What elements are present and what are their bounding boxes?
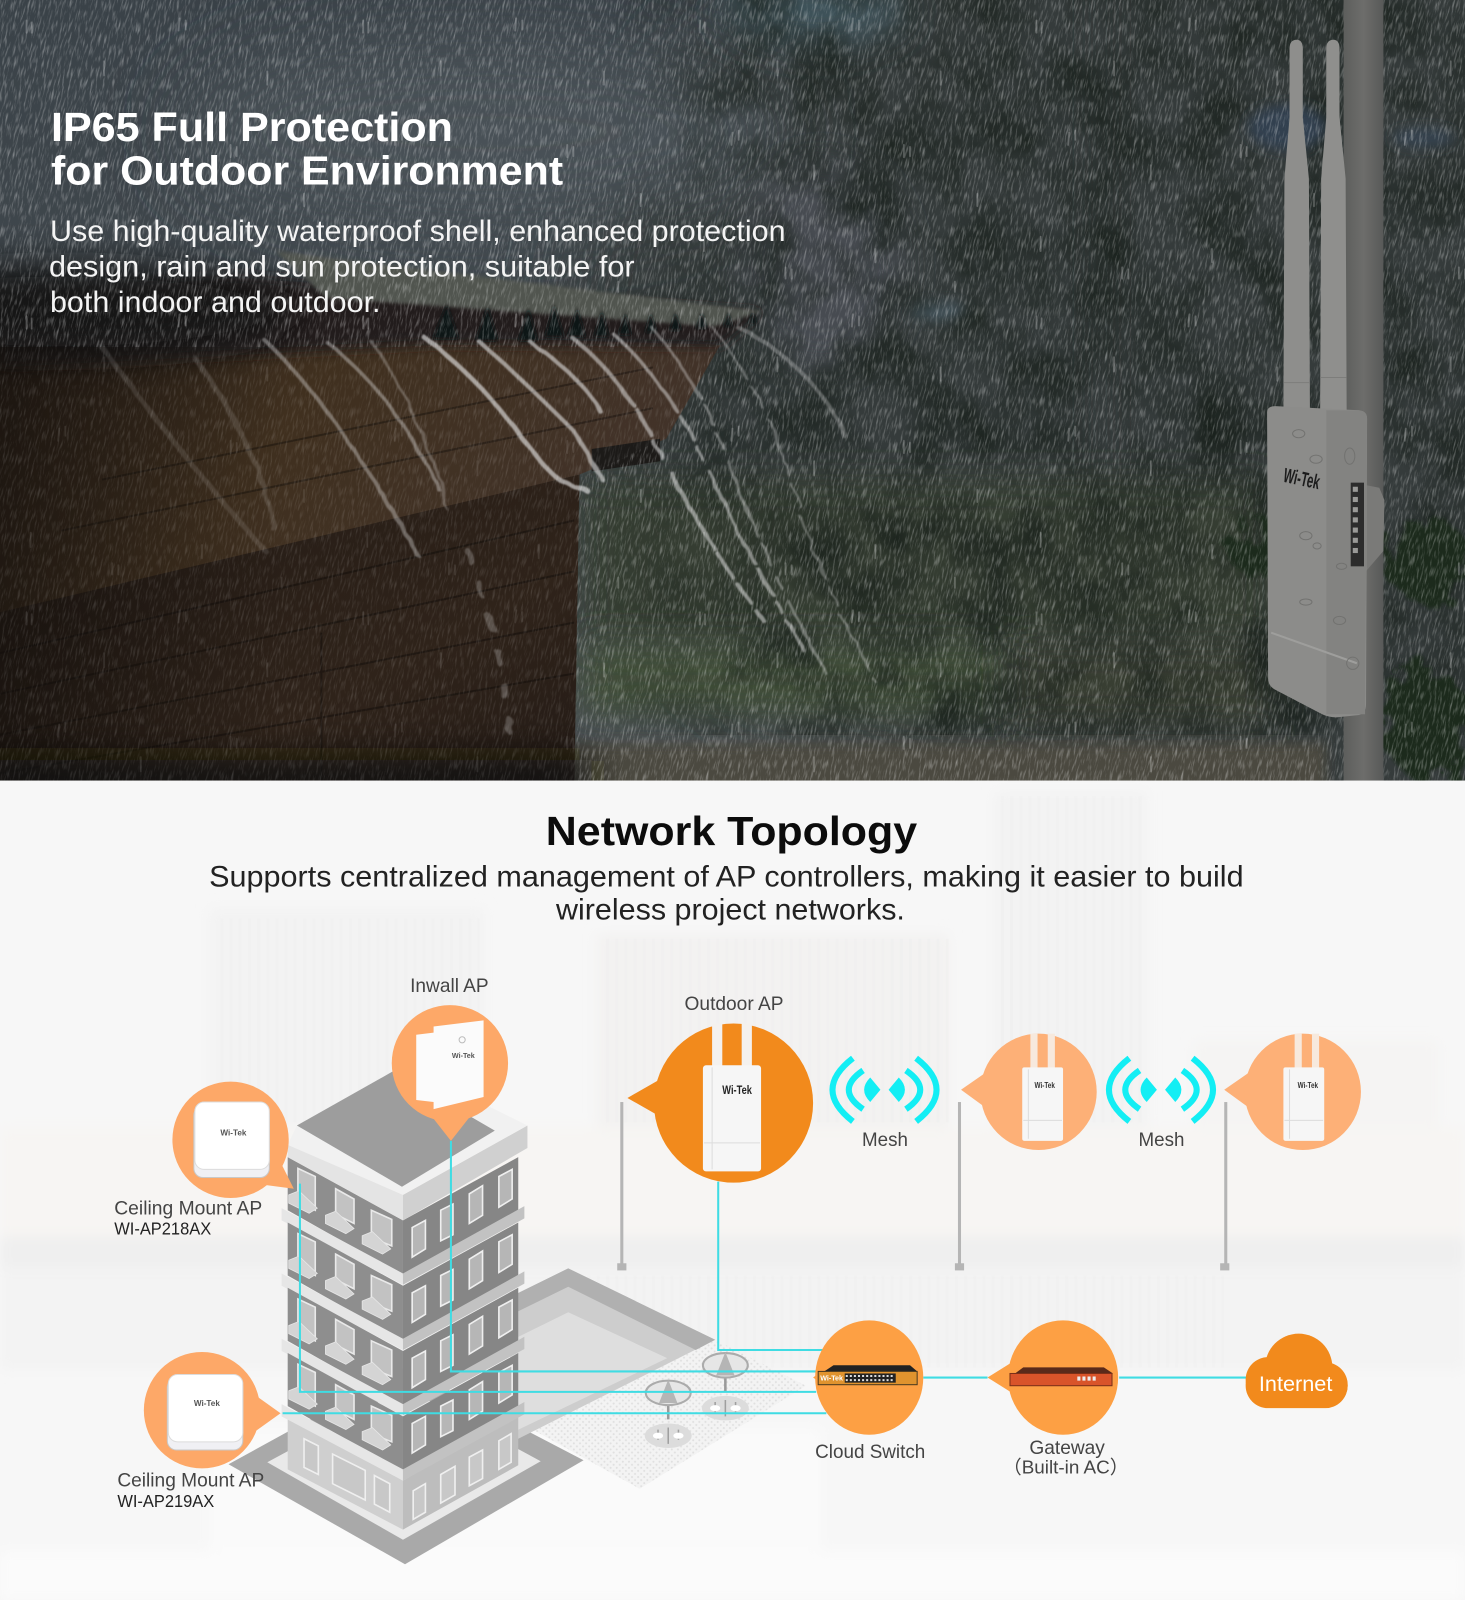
icon: mesh signal 2 [1109, 1058, 1213, 1121]
bubble: outdoor AP 3: Wi-Tek [1298, 1081, 1318, 1090]
label: gateway: （Built-in AC） [1003, 1456, 1129, 1477]
hero title [52, 112, 563, 185]
poles [617, 1102, 1229, 1270]
subheading [209, 861, 1244, 926]
icon: mesh signal 1 [832, 1058, 937, 1121]
pole [1344, 0, 1383, 781]
label: ceiling mount AP 219: WI-AP219AX [117, 1491, 215, 1511]
label: outdoor AP: Outdoor AP [685, 993, 784, 1015]
bubble: cloud switch: Wi-Tek [820, 1375, 843, 1383]
bubble: inwall AP [392, 1005, 508, 1141]
roof and wooden building [0, 251, 763, 801]
heading: Network Topology [546, 808, 917, 854]
bubble: ceiling AP 219: Wi-Tek [194, 1399, 220, 1408]
label: cloud switch: Cloud Switch [815, 1441, 925, 1463]
bubble: outdoor AP 2: Wi-Tek [1034, 1081, 1055, 1090]
roof [288, 1071, 527, 1220]
icon: internet cloud: Internet [1259, 1372, 1332, 1396]
hero title: IP65 Full Protection [51, 104, 453, 150]
water streams from roof [102, 324, 877, 735]
bubble: outdoor AP 3 [1224, 1034, 1361, 1150]
label: mesh 2: Mesh [1139, 1129, 1184, 1151]
panel: network topology [0, 781, 1465, 1600]
bubble: cloud switch [813, 1320, 923, 1435]
bubble: ceiling AP 218: Wi-Tek [220, 1129, 247, 1138]
bubble: main outdoor AP [627, 1023, 813, 1183]
label: ceiling mount AP 219: Ceiling Mount AP [117, 1470, 264, 1492]
umbrellas [702, 1352, 749, 1420]
umbrella 2 [645, 1380, 692, 1448]
icon: internet cloud [1246, 1334, 1348, 1408]
logo on outdoor AP: Wi-Tek [1281, 465, 1322, 494]
courtyard and plaza [229, 1268, 806, 1564]
hero description [50, 220, 784, 312]
bubble: inwall AP: Wi-Tek [452, 1052, 475, 1060]
rain overlay [0, 0, 1465, 781]
hero title: for Outdoor Environment [51, 148, 564, 194]
hero description: design, rain and sun protection, suitable for [49, 251, 635, 284]
label: inwall AP: Inwall AP [410, 975, 489, 997]
bubble: outdoor AP 2 [961, 1034, 1097, 1150]
hero description: Use high-quality waterproof shell, enhanced protection [50, 215, 786, 248]
label: ceiling mount AP 219 [117, 1470, 264, 1511]
label: mesh 1: Mesh [862, 1129, 908, 1151]
cables [283, 1141, 1247, 1413]
faint city background [0, 791, 1465, 1600]
bubble: main outdoor AP: Wi-Tek [722, 1083, 752, 1097]
label: gateway: Gateway [1029, 1437, 1105, 1459]
bubble: ceiling AP 218 [172, 1082, 294, 1198]
label: ceiling mount AP 218 [114, 1197, 262, 1239]
subheading: wireless project networks. [555, 893, 905, 926]
subheading: Supports centralized management of AP controllers, making it easier to build [209, 861, 1244, 894]
hero description: both indoor and outdoor. [50, 286, 381, 319]
building [282, 1071, 527, 1530]
bubble: ceiling AP 219 [144, 1352, 281, 1468]
panel: rain hero photo [0, 0, 1465, 816]
bubble: gateway [988, 1320, 1118, 1435]
outdoor AP device [1267, 40, 1384, 717]
label: ceiling mount AP 218: Ceiling Mount AP [114, 1197, 262, 1219]
label: gateway [1003, 1437, 1129, 1477]
label: ceiling mount AP 218: WI-AP218AX [114, 1219, 212, 1239]
